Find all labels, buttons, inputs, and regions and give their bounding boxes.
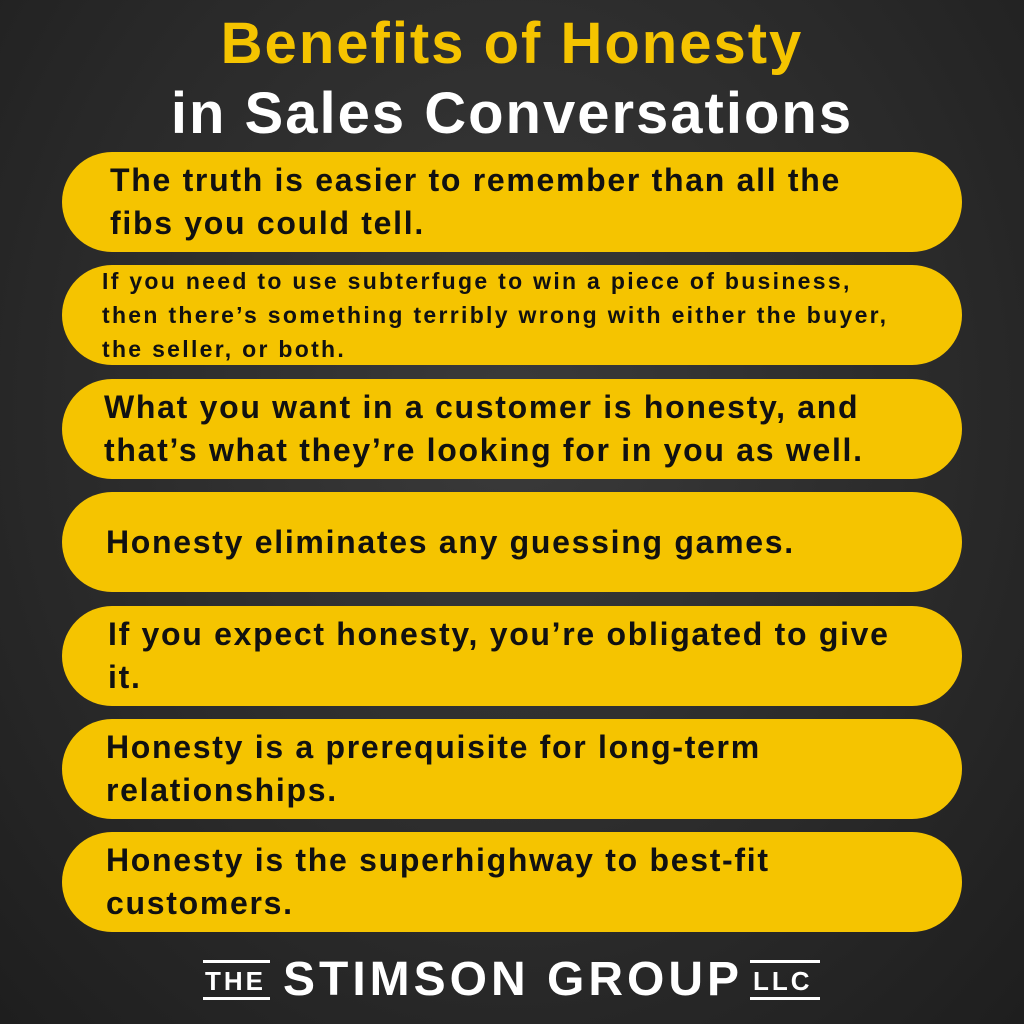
pill 2 (62, 265, 962, 365)
pill 3 (62, 379, 962, 479)
pill 6: Honesty is a prerequisite for long-term (106, 729, 761, 765)
title line 1: Benefits of Honesty (221, 11, 803, 76)
pill 6: relationships. (106, 772, 338, 808)
pill 1 (62, 152, 962, 252)
logo: LLC (753, 966, 813, 996)
logo: STIMSON GROUP (283, 953, 743, 1006)
pill 7 (62, 832, 962, 932)
pill 3: What you want in a customer is honesty, and (104, 389, 859, 425)
pill 4: Honesty eliminates any guessing games. (106, 524, 795, 560)
pill 2: the seller, or both. (102, 336, 346, 362)
pill 4 (62, 492, 962, 592)
pill 7: customers. (106, 885, 294, 921)
title line 2: in Sales Conversations (171, 81, 853, 146)
pill 5: If you expect honesty, you’re obligated to give (108, 616, 890, 652)
pill 5: it. (108, 659, 142, 695)
pill 7: Honesty is the superhighway to best-fit (106, 842, 770, 878)
pill 1: The truth is easier to remember than all the (110, 162, 841, 198)
pill 2: then there’s something terribly wrong with either the buyer, (102, 302, 888, 328)
pill 6 (62, 719, 962, 819)
pill 1: fibs you could tell. (110, 205, 425, 241)
pill 2: If you need to use subterfuge to win a piece of business, (102, 268, 852, 294)
pill 5 (62, 606, 962, 706)
logo: THE (205, 966, 266, 996)
pill 3: that’s what they’re looking for in you as well. (104, 432, 864, 468)
